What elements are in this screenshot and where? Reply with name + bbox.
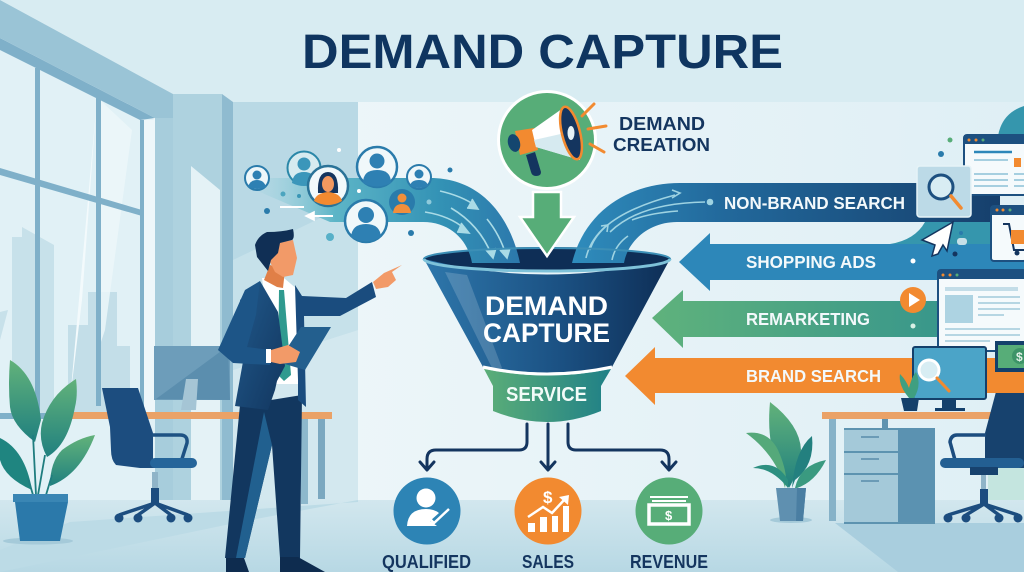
person icon orange: [389, 189, 415, 215]
left potted plant: [0, 360, 95, 544]
title: DEMAND CAPTURE: [302, 26, 783, 79]
arrow labels: REMARKETING: [746, 309, 870, 329]
trousers: [225, 395, 302, 558]
roof beam: [0, 0, 173, 118]
search tile: [917, 166, 971, 217]
clipboard: [278, 327, 331, 370]
person icon woman: [308, 166, 348, 206]
right desk with drawers: [822, 412, 1024, 524]
teal wave behind right icons: [890, 222, 1024, 244]
money note: [995, 341, 1024, 372]
large web page: [938, 270, 1024, 351]
funnel label: DEMAND: [485, 291, 608, 321]
play button: [900, 287, 926, 313]
left desk with monitor: [68, 346, 332, 504]
remarketing arrow: [652, 290, 960, 348]
cursor: [922, 222, 953, 256]
hands: [271, 345, 300, 364]
person icon large bottom: [345, 200, 387, 242]
outcome: sales: SALES: [522, 552, 574, 572]
funnel spout: [484, 369, 611, 422]
window with skyline: [0, 0, 233, 500]
megaphone: [506, 104, 606, 176]
left arm: [218, 281, 270, 365]
necktie: [278, 290, 291, 381]
funnel label: CAPTURE: [483, 318, 610, 348]
person icon small left: [245, 166, 269, 190]
arrow labels: NON-BRAND SEARCH: [724, 193, 905, 213]
demand creation label: CREATION: [613, 134, 710, 155]
outcome: sales: [514, 478, 582, 572]
left audience flow: [255, 178, 520, 263]
outcome: revenue: $: [665, 508, 673, 523]
megaphone badge: [497, 90, 606, 256]
browser window top: [964, 135, 1024, 195]
person icon small right: [407, 165, 431, 189]
outcome: revenue: [630, 478, 708, 572]
neck and face: [264, 265, 285, 288]
brand search arrow: [625, 347, 1024, 405]
funnel label: [483, 291, 610, 348]
outcome: revenue: REVENUE: [630, 552, 708, 572]
hair: [255, 229, 294, 271]
shoes: [226, 557, 325, 572]
person icon large top: [357, 147, 397, 187]
funnel: [424, 248, 670, 422]
arrow labels: BRAND SEARCH: [746, 366, 881, 386]
funnel body: [424, 259, 670, 372]
column: [155, 118, 173, 500]
demand creation label: DEMAND: [619, 113, 705, 134]
right side digital icons: [900, 106, 1024, 411]
flow lines: [586, 190, 712, 260]
output connector arrows: [420, 424, 676, 470]
outcome: sales: $: [543, 488, 553, 507]
green down arrow: [520, 192, 574, 256]
non-brand search arrow band: [572, 183, 1000, 263]
person icon teal: [288, 152, 320, 186]
arrow labels: [724, 193, 905, 386]
cart window: [991, 206, 1024, 261]
right potted plant: [746, 402, 826, 523]
money note: $: [1016, 350, 1023, 364]
businessman pointing: [218, 229, 402, 572]
spout label: SERVICE: [506, 384, 587, 406]
shopping ads arrow: [679, 233, 1024, 291]
jacket: [235, 281, 285, 410]
demand creation label: [613, 113, 710, 155]
funnel rim: [424, 259, 670, 271]
monitor with magnifier: [913, 347, 986, 411]
outcome: qualified: QUALIFIED: [382, 552, 471, 572]
small desk plant: [900, 372, 919, 411]
window frame: [0, 38, 160, 419]
outcome: qualified: [382, 478, 471, 572]
ceiling: [0, 0, 1024, 102]
flow arrows: [280, 191, 510, 258]
rear wall panel: [233, 102, 358, 502]
funnel back interior: [425, 247, 669, 271]
left office chair: [102, 388, 197, 522]
teal shape top right: [998, 106, 1024, 136]
audience icons: [245, 147, 452, 242]
right office chair: [940, 388, 1024, 522]
arrow labels: SHOPPING ADS: [746, 252, 876, 272]
shirt: [262, 278, 298, 382]
floor: [0, 500, 1024, 572]
